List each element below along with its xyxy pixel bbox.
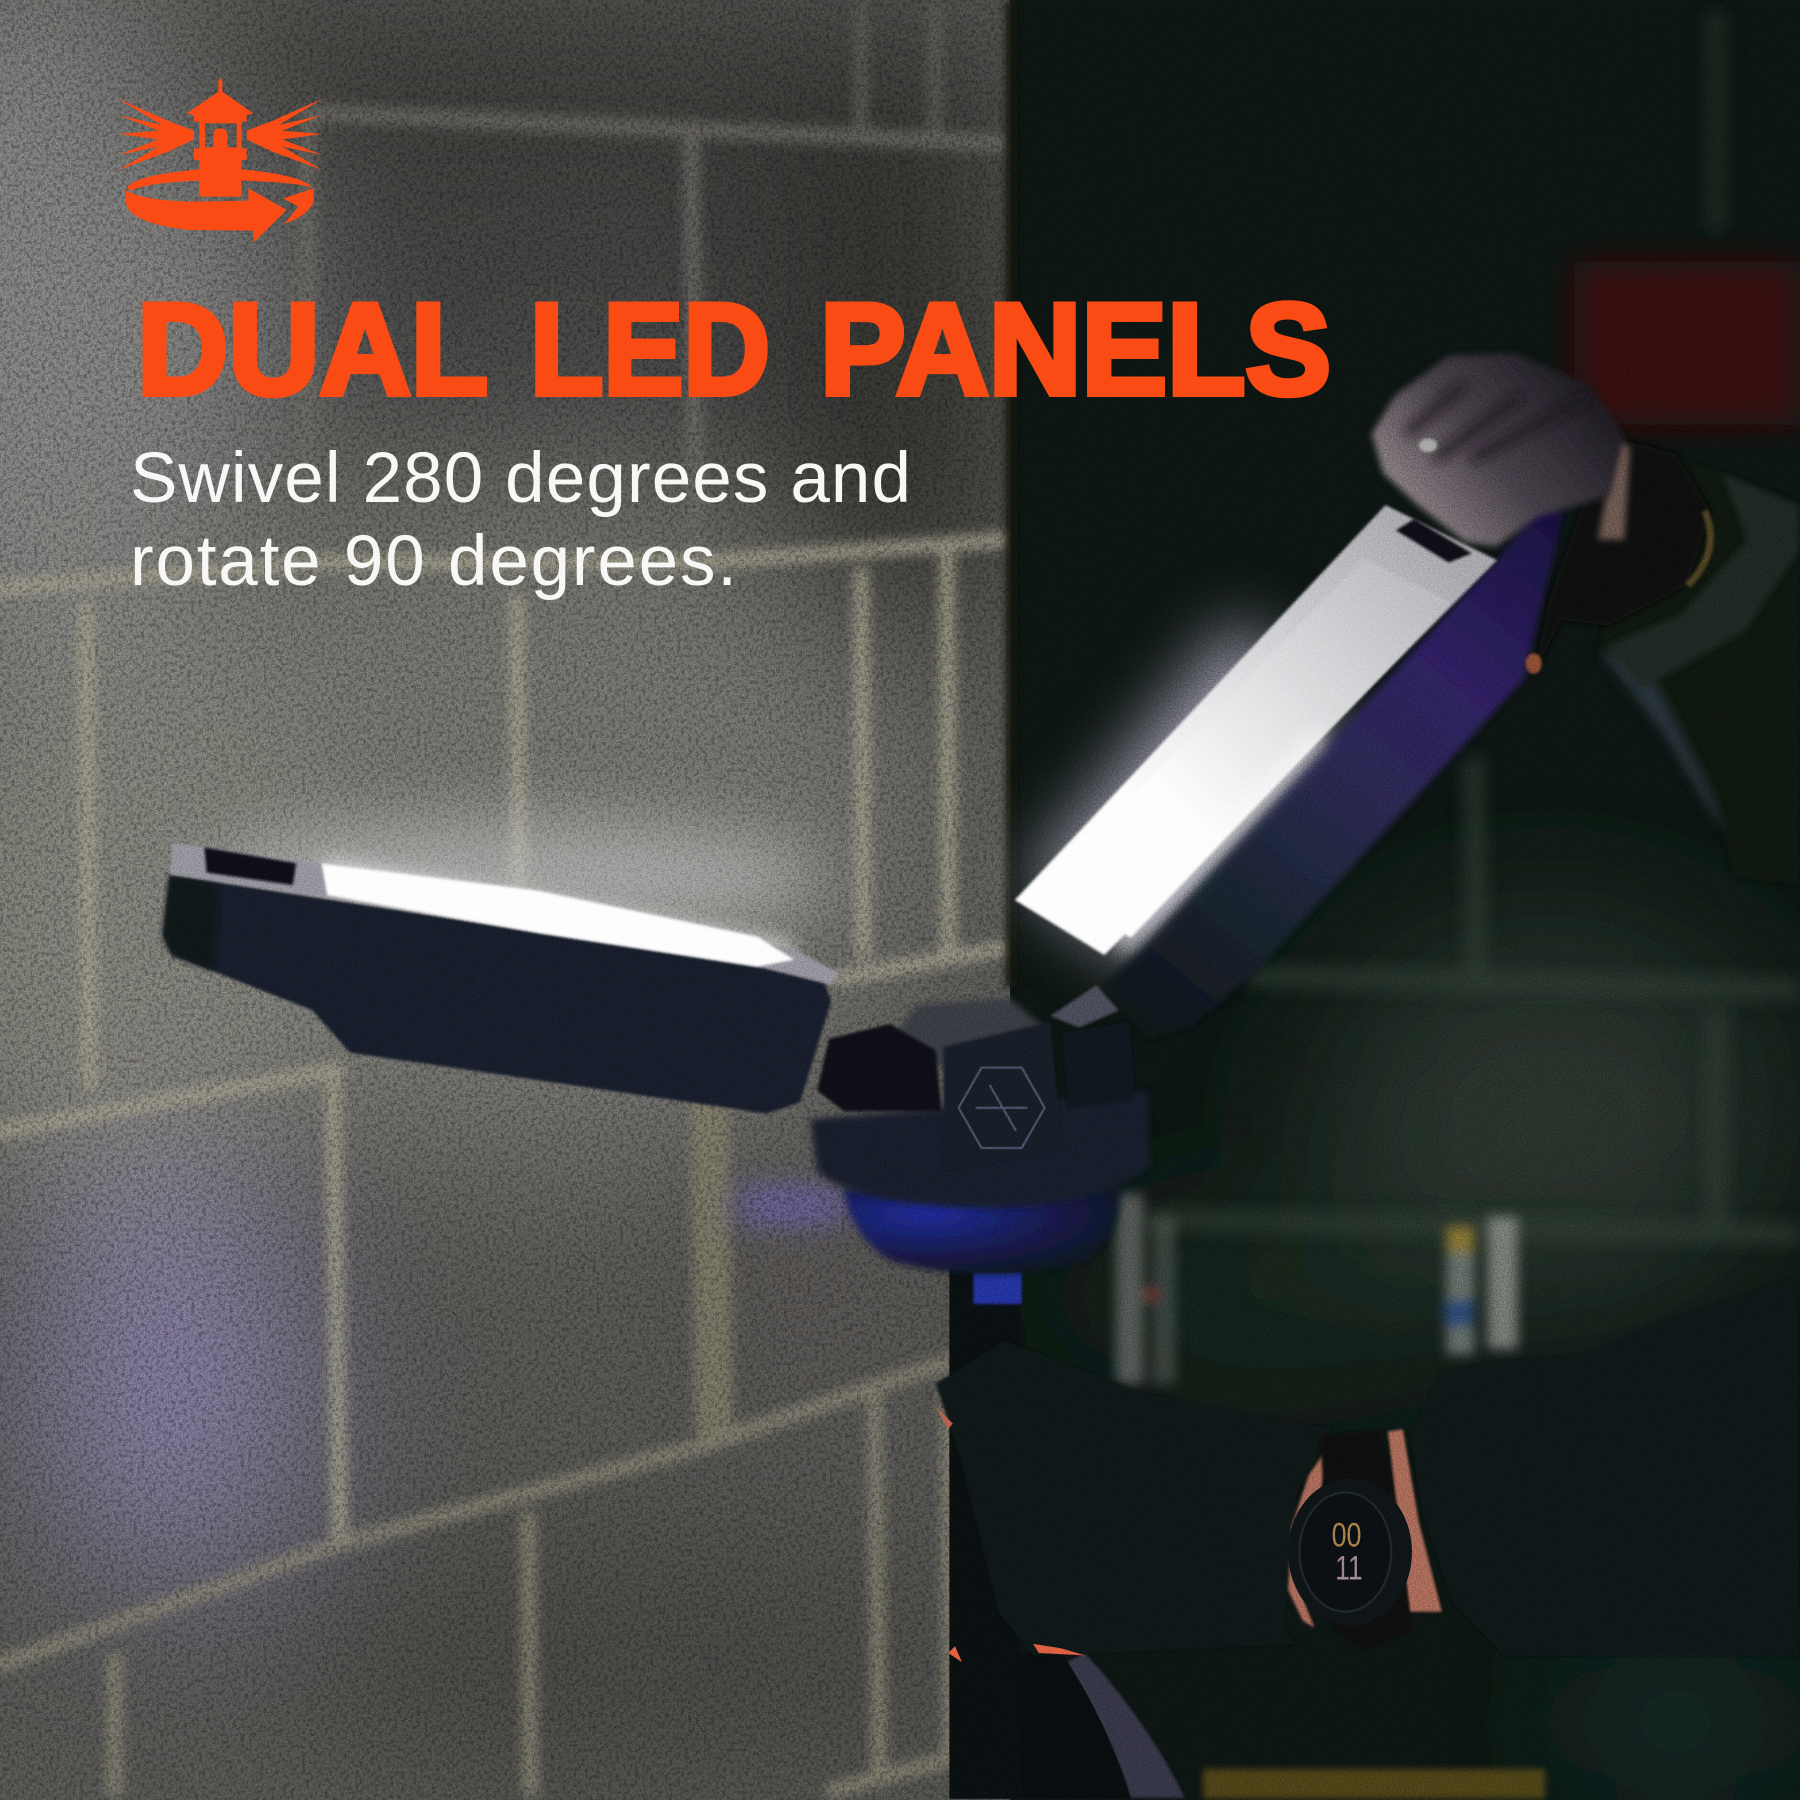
right arm sleeve (1410, 1277, 1799, 1655)
handle cut-out (204, 847, 296, 885)
purple light spill on hub side (729, 1187, 855, 1224)
arrow tail (283, 188, 314, 224)
glow of strip (321, 872, 792, 955)
lower hand with watch (936, 1277, 1799, 1662)
upper hand and sleeve (1372, 354, 1799, 884)
red block (1575, 262, 1800, 425)
arm stem (1050, 985, 1119, 1027)
watch digits: 00 (1332, 1516, 1361, 1554)
skin at wrist (1288, 1437, 1335, 1628)
glow around raised panel (207, 620, 1343, 964)
watch (1288, 1429, 1412, 1648)
subtitle: rotate 90 degrees. (130, 522, 737, 601)
tan crate (1203, 1769, 1545, 1799)
bright lit area (1049, 558, 1451, 938)
title: DUAL (137, 276, 488, 422)
sleeve edge highlight (1599, 651, 1724, 835)
icon: rotating lighthouse (117, 79, 323, 243)
knuckle shadows (1406, 385, 1590, 459)
centre block (944, 1022, 1062, 1171)
wall edge (1006, 0, 1015, 987)
skin (1598, 439, 1630, 540)
wall: grey concrete blocks (0, 0, 1056, 1800)
panel face (1015, 505, 1497, 955)
subtitle: Swivel 280 degrees and (130, 439, 911, 518)
lamp hub (810, 985, 1150, 1274)
raised LED panel (1015, 501, 1564, 1039)
watch: 11 (1335, 1550, 1363, 1588)
blurred equipment posts (1116, 1194, 1518, 1383)
subtitle (130, 439, 911, 601)
rotation arrow (126, 188, 287, 243)
right rays (247, 98, 323, 170)
sleeve cuff pattern (1607, 473, 1799, 689)
mortar lines (0, 8, 1010, 1791)
base dome (844, 1188, 1120, 1274)
lighthouse tower (187, 79, 253, 197)
left joint (817, 1024, 941, 1111)
title (137, 276, 1331, 422)
ring (1419, 439, 1437, 452)
cap (895, 999, 1045, 1068)
ring (810, 1091, 1150, 1208)
handle slot (1396, 519, 1472, 562)
title: PANELS (820, 276, 1331, 422)
glove orange reflection (1033, 1644, 1085, 1655)
sleeve (1599, 442, 1799, 884)
concrete texture (0, 0, 1010, 1800)
light haze on the panel back (1119, 735, 1320, 947)
left LED panel (163, 843, 840, 1114)
panel rim (170, 843, 840, 985)
light strip (321, 863, 794, 967)
panel back (1104, 501, 1564, 1039)
glove fingers (1372, 354, 1624, 546)
rotation ring back (127, 169, 313, 191)
background right: dark green wall (1006, 0, 1800, 1800)
right joint (1062, 1022, 1134, 1108)
pole (949, 1268, 1185, 1799)
dark wrist strap (1533, 436, 1710, 677)
hexagon logo (959, 1068, 1045, 1148)
panel body (163, 875, 831, 1114)
panel end shade (163, 875, 218, 970)
left rays (117, 98, 194, 170)
title: LED (530, 276, 770, 422)
left glove (936, 1341, 1332, 1655)
